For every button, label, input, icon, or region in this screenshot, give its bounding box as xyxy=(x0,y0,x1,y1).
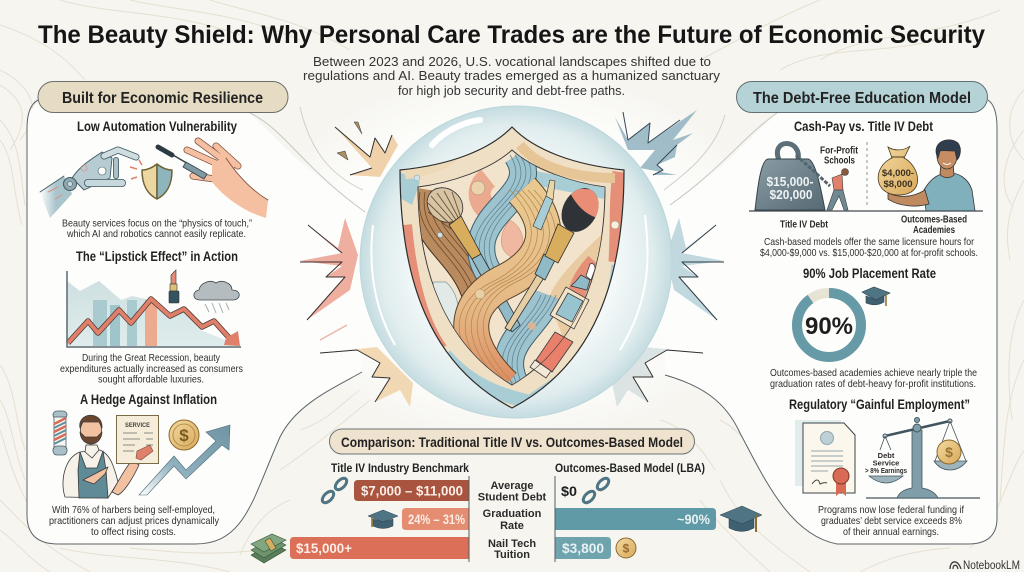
icon: graduation cap xyxy=(862,287,890,306)
icon: robot hand xyxy=(40,150,136,218)
icon: rain cloud xyxy=(194,281,239,313)
icon: certificate xyxy=(795,420,855,496)
icon: service card xyxy=(116,416,158,464)
right side waves xyxy=(560,240,612,345)
icon: small shield xyxy=(142,164,172,199)
label: debt service xyxy=(865,451,907,475)
icon: sparks xyxy=(130,160,142,179)
icon: debt weight: $20,000 xyxy=(770,187,812,202)
icon: money bag xyxy=(878,146,918,195)
central emblem: shield in bubble xyxy=(300,106,724,418)
heading pill: Built for Economic Resilience xyxy=(62,90,263,107)
chart: 90 percent donut: 90% xyxy=(805,313,853,340)
bar: title iv tuition xyxy=(290,537,469,559)
icon: dollar coin xyxy=(169,420,199,450)
bar: title iv graduation: 24% – 31% xyxy=(408,512,465,527)
text: great recession: expenditures actually increased as consumers xyxy=(60,363,243,375)
text: self-employed xyxy=(49,504,220,538)
brown hair xyxy=(418,188,462,297)
center white glow xyxy=(255,72,775,452)
intro text: regulations and AI. Beauty trades emerged as a humanized sanctuary xyxy=(303,68,721,83)
text: great recession: sought affordable luxuries. xyxy=(98,374,204,386)
glass bubble xyxy=(360,106,672,418)
heading: hedge against inflation: A Hedge Against Inflation xyxy=(80,392,217,407)
row labels: Graduation xyxy=(483,508,542,520)
brush right xyxy=(504,188,598,332)
icon: barber xyxy=(63,415,139,498)
icon: debt weight xyxy=(755,144,825,210)
heading pill xyxy=(330,429,694,454)
gold hair xyxy=(471,190,543,386)
icon: mascara and human hand xyxy=(158,141,268,218)
icon: rising arrow xyxy=(139,425,230,495)
heading: low automation: Low Automation Vulnerability xyxy=(77,119,237,134)
label: debt service: Service xyxy=(873,458,899,468)
label: title iv debt: Title IV Debt xyxy=(780,220,829,230)
text: cash-based xyxy=(760,236,978,259)
icon: cap left xyxy=(368,510,398,528)
icon: cash stack xyxy=(251,534,286,563)
text: cash-based: $4,000-$9,000 vs. $15,000-$20,000 at for-profit schools. xyxy=(760,247,978,259)
icon: scale coin: $ xyxy=(945,444,953,460)
bar: outcomes graduation: ~90% xyxy=(677,512,710,527)
blue hair top xyxy=(481,155,523,290)
label: debt service: Debt xyxy=(878,451,895,460)
text: graduation xyxy=(770,367,977,390)
text: great recession: During the Great Recession, beauty xyxy=(82,352,221,364)
blue hair bottom xyxy=(509,295,548,392)
bar: outcomes tuition xyxy=(555,537,611,559)
panel: built for economic resilience xyxy=(38,82,288,538)
bar: title iv tuition: $15,000+ xyxy=(296,541,352,556)
icon: broken chain right xyxy=(581,476,611,505)
row labels: Student Debt xyxy=(478,492,547,504)
panel: left background xyxy=(27,98,362,544)
text: graduation: graduation rates of debt-heavy for-profit institutions. xyxy=(770,378,976,390)
text: self-employed: to offect rising costs. xyxy=(91,526,176,538)
panel outlines xyxy=(27,100,997,544)
impact bursts xyxy=(300,110,724,407)
heading: cash-pay: Cash-Pay vs. Title IV Debt xyxy=(794,119,933,134)
text: federal funding: Programs now lose federal funding if xyxy=(818,504,964,516)
pencil xyxy=(533,180,555,230)
row labels: Nail Tech xyxy=(488,538,536,550)
heading: gainful employment: Regulatory “Gainful Employment” xyxy=(789,397,970,412)
icon: barber pole xyxy=(53,411,67,455)
chart: lipstick effect xyxy=(67,271,241,347)
text: federal funding: graduates’ debt service exceeds 8% xyxy=(821,515,962,527)
column heading: title iv: Title IV Industry Benchmark xyxy=(331,461,469,475)
icon: service card: SERVICE xyxy=(125,422,151,429)
bar: title iv debt: $7,000 – $11,000 xyxy=(361,484,463,498)
label: for-profit schools xyxy=(820,146,859,166)
label: for-profit schools: Schools xyxy=(824,156,855,166)
row labels xyxy=(478,480,547,561)
text: physics of touch: which AI and robotics cannot easily replicate. xyxy=(66,228,246,240)
panel: right background xyxy=(665,98,997,544)
icon: coin xyxy=(616,538,636,558)
chart: 90 percent donut xyxy=(797,293,861,357)
icon: debt weight: $15,000- xyxy=(766,174,814,189)
text: federal funding: of their annual earnings. xyxy=(843,526,939,538)
icon: coin: $ xyxy=(623,542,630,556)
label: outcomes-based academies: Academies xyxy=(913,225,955,236)
row labels: Rate xyxy=(500,520,524,532)
bar: outcomes graduation xyxy=(555,508,716,530)
makeup brush left xyxy=(472,254,520,332)
bar: outcomes tuition: $3,800 xyxy=(562,541,604,556)
icon: burdened person xyxy=(827,168,848,210)
value: zero debt: $0 xyxy=(561,483,577,499)
text: self-employed: With 76% of harbers being self-employed, xyxy=(52,504,215,516)
intro text: Between 2023 and 2026, U.S. vocational landscapes shifted due to xyxy=(313,54,711,69)
label: outcomes-based academies xyxy=(901,214,967,236)
icon: money bag: $4,000- xyxy=(882,168,914,179)
label: outcomes-based academies: Outcomes-Based xyxy=(901,214,967,226)
heading pill xyxy=(38,82,288,112)
heading: lipstick effect: The “Lipstick Effect” in Action xyxy=(76,249,238,264)
label: for-profit schools: For-Profit xyxy=(820,146,859,156)
icon: dollar coin: $ xyxy=(179,426,189,445)
icon: cap right xyxy=(720,506,762,532)
panel: comparison xyxy=(251,429,762,563)
panel: debt-free education model xyxy=(736,82,988,538)
heading pill: Comparison: Traditional Title IV vs. Outcomes-Based Model xyxy=(341,434,683,450)
icon: smiling man xyxy=(888,140,975,211)
text: great recession xyxy=(60,352,243,386)
title: The Beauty Shield: Why Personal Care Trades are the Future of Economic Security xyxy=(38,21,985,49)
intro text: for high job security and debt-free paths. xyxy=(398,83,625,98)
icon: broken chain left xyxy=(320,476,349,505)
row labels: Tuition xyxy=(494,549,530,561)
heading pill xyxy=(736,82,988,112)
icon: chain xyxy=(796,155,830,186)
bar: title iv graduation xyxy=(402,508,469,530)
row labels: Average xyxy=(490,480,534,492)
text: federal funding xyxy=(818,504,964,538)
icon: balance scale xyxy=(866,418,980,498)
shield xyxy=(400,127,624,408)
text: self-employed: practitioners can adjust prices dynamically xyxy=(49,515,220,527)
column heading: outcomes-based: Outcomes-Based Model (LBA) xyxy=(555,461,705,475)
text: physics of touch: Beauty services focus on the “physics of touch,” xyxy=(62,218,252,230)
icon: money bag: $8,000 xyxy=(883,179,913,190)
intro text xyxy=(303,54,721,98)
text: cash-based: Cash-based models offer the same licensure hours for xyxy=(764,236,974,248)
bottle and tube xyxy=(530,264,595,378)
icon: scale coin xyxy=(937,440,961,464)
text: physics of touch xyxy=(62,218,252,240)
bar: title iv debt xyxy=(354,480,469,501)
text: graduation: Outcomes-based academies achieve nearly triple the xyxy=(770,367,977,379)
brush left head xyxy=(420,181,481,259)
label: debt service: > 8% Earnings xyxy=(865,466,907,475)
heading pill: The Debt-Free Education Model xyxy=(753,90,971,107)
heading: job placement: 90% Job Placement Rate xyxy=(803,266,936,281)
inner shield field xyxy=(418,150,605,385)
icon: lipstick xyxy=(169,270,179,303)
